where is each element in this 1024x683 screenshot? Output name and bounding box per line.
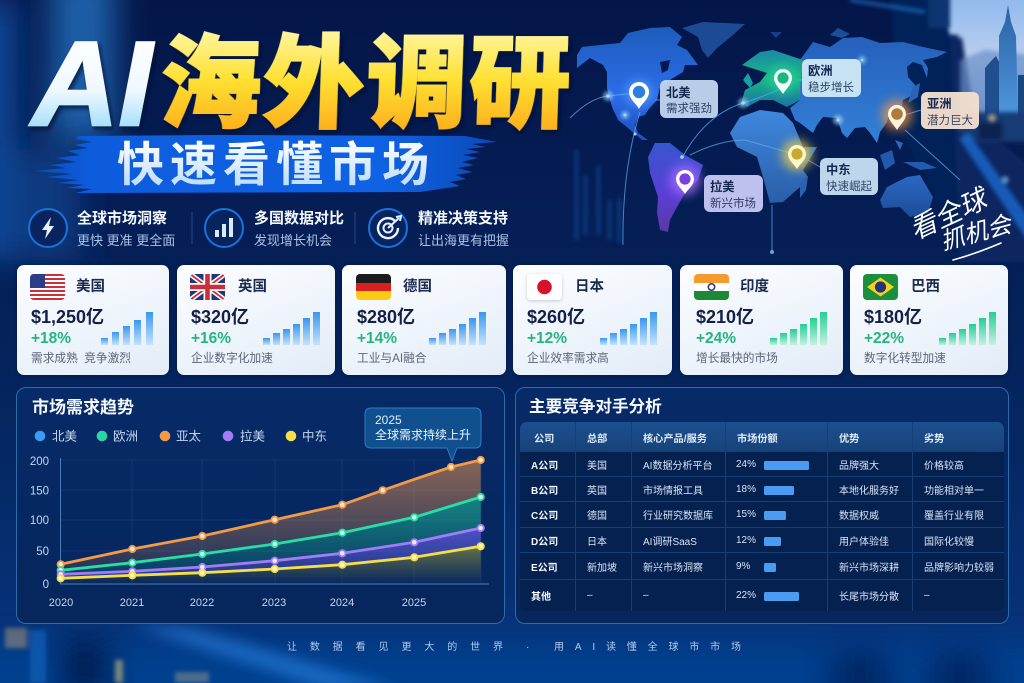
description: 需求成熟 竞争激烈 <box>31 352 131 365</box>
heading: competitor analysis: 主要竞争对手分析 <box>529 397 662 416</box>
label: Asia: 亚洲 <box>927 97 952 111</box>
feature: data comparison <box>254 210 344 248</box>
row: E: 品牌影响力较弱 <box>924 563 994 574</box>
card: Japan <box>513 265 672 375</box>
mini bars <box>429 312 486 345</box>
label: Middle East <box>820 158 878 195</box>
row: E: E公司 <box>531 563 558 574</box>
pin: North America <box>626 80 652 109</box>
title: AI: AI <box>29 17 155 151</box>
row: C <box>520 502 1004 528</box>
label: Europe: 稳步增长 <box>808 80 854 94</box>
country name: 英国 <box>238 279 267 295</box>
table header: 劣势 <box>924 434 944 444</box>
growth: +18% <box>31 330 71 347</box>
label: Latin America: 新兴市场 <box>710 196 756 210</box>
feature: data comparison: 多国数据对比 <box>254 210 344 227</box>
row: B: 本地化服务好 <box>839 486 899 497</box>
row: E: 新加坡 <box>587 563 617 574</box>
label: North America: 北美 <box>666 85 691 100</box>
y-axis labels <box>30 456 49 591</box>
legend: 北美 <box>52 430 77 444</box>
row: C: 覆盖行业有限 <box>924 511 984 522</box>
handwritten slogan: 抓机会 <box>936 204 1017 257</box>
row: others: – <box>924 590 930 601</box>
flag: India <box>694 274 729 300</box>
country name: 巴西 <box>911 279 940 295</box>
legend: 中东 <box>302 428 327 444</box>
table header: 总部 <box>587 434 607 444</box>
row: E: 新兴市场洞察 <box>643 563 703 574</box>
label: Middle East: 中东 <box>826 162 851 177</box>
x-axis labels: 2023 <box>262 597 286 609</box>
legend: 欧洲 <box>113 430 138 444</box>
row: C: 数据权威 <box>839 511 879 522</box>
country name: 美国 <box>76 279 105 295</box>
card: Brazil <box>850 265 1008 375</box>
feature: global insight: 更快 更准 更全面 <box>77 233 175 248</box>
growth: +16% <box>191 330 231 347</box>
subtitle: 快速看懂市场 <box>117 126 429 195</box>
table header: 市场份额 <box>737 434 778 444</box>
row: others: – <box>587 590 593 601</box>
x-axis labels: 2020 <box>49 597 73 609</box>
row: A: 24% <box>736 459 756 470</box>
row: A <box>520 452 1004 477</box>
label: North America <box>660 80 718 118</box>
table header: 核心产品/服务 <box>643 434 707 444</box>
series: Middle East <box>58 543 484 582</box>
row: A: 美国 <box>587 461 607 472</box>
feature: decision support: 让出海更有把握 <box>418 233 509 248</box>
description: 企业效率需求高 <box>527 352 609 365</box>
heading: market demand trend: 市场需求趋势 <box>32 398 134 417</box>
row: C: 15% <box>736 509 756 520</box>
label: Europe <box>802 59 861 97</box>
row: others: 长尾市场分散 <box>839 592 899 603</box>
row: E: 新兴市场深耕 <box>839 563 899 574</box>
mini bars <box>263 312 320 345</box>
mini bars <box>101 312 153 345</box>
market value: $210亿 <box>696 307 754 327</box>
row: A: 价格较高 <box>924 461 964 472</box>
series: Latin America <box>58 525 484 578</box>
table header: 优势 <box>839 434 859 444</box>
legend <box>35 428 327 444</box>
growth: +24% <box>696 330 736 347</box>
competitor table <box>520 422 1004 611</box>
description: 企业数字化加速 <box>191 352 273 365</box>
callout: 全球需求持续上升 <box>375 427 471 442</box>
flag: Brazil <box>863 274 898 300</box>
country name: 日本 <box>575 279 604 295</box>
description: 数字化转型加速 <box>864 352 946 365</box>
label: Asia: 潜力巨大 <box>927 113 973 127</box>
row: B <box>520 477 1004 502</box>
row: others <box>531 580 930 611</box>
label: Europe: 欧洲 <box>808 63 833 78</box>
market value: $280亿 <box>357 307 415 327</box>
connection arcs <box>570 80 960 250</box>
feature: decision support <box>418 210 509 248</box>
x-axis labels: 2024 <box>330 597 354 609</box>
row: others: 其他 <box>531 592 551 603</box>
y-axis labels: 200 <box>30 456 49 468</box>
row: D: 国际化较慢 <box>924 537 974 548</box>
row: D: D公司 <box>531 537 558 548</box>
row: B: B公司 <box>531 486 558 497</box>
market value: $260亿 <box>527 307 585 327</box>
row: D: 12% <box>736 535 756 546</box>
description: 工业与AI融合 <box>357 352 426 365</box>
row: C: 德国 <box>587 511 607 522</box>
title: 海外调研: 海外调研 <box>158 3 573 149</box>
row: A: A公司 <box>531 461 558 472</box>
row: E <box>520 553 1004 580</box>
table header <box>520 422 1004 452</box>
row: A: AI数据分析平台 <box>643 461 712 472</box>
market value: $320亿 <box>191 307 249 327</box>
label: Latin America <box>704 175 763 212</box>
x-axis labels: 2021 <box>120 597 144 609</box>
growth: +12% <box>527 330 567 347</box>
mini bars <box>939 312 996 345</box>
table header: 公司 <box>534 434 554 444</box>
legend: 拉美 <box>240 428 265 444</box>
continents <box>577 22 947 232</box>
row: B: 18% <box>736 484 756 495</box>
flag: UK <box>190 274 225 300</box>
label: Middle East: 快速崛起 <box>826 179 872 193</box>
footer slogan: · <box>526 642 529 653</box>
x-axis labels: 2022 <box>190 597 214 609</box>
area fills <box>61 460 481 584</box>
row: D <box>520 528 1004 553</box>
flag: USA <box>30 274 65 300</box>
row: D: 日本 <box>587 537 607 548</box>
y-axis labels: 0 <box>43 579 49 591</box>
panel: market demand trend <box>16 387 505 624</box>
mini bars <box>600 312 657 345</box>
market value: $1,250亿 <box>31 307 104 327</box>
row: E: 9% <box>736 561 750 572</box>
row: C: 行业研究数据库 <box>643 511 713 522</box>
pin: Europe <box>769 65 797 94</box>
pin: Middle East <box>782 140 812 170</box>
icon: bar chart <box>205 209 243 247</box>
icon: target <box>369 209 407 247</box>
panel: competitor analysis <box>515 387 1009 624</box>
row: B: 英国 <box>587 486 607 497</box>
row: C: C公司 <box>531 511 558 522</box>
market value: $180亿 <box>864 307 922 327</box>
card: India <box>680 265 843 375</box>
feature: global insight <box>77 210 175 248</box>
growth: +14% <box>357 330 397 347</box>
x-axis labels: 2025 <box>402 597 426 609</box>
country name: 德国 <box>403 279 432 295</box>
y-axis labels: 50 <box>36 546 49 558</box>
footer slogan: 用AI读懂全球市市场 <box>554 640 741 653</box>
y-axis labels: 150 <box>30 486 49 498</box>
series: Europe <box>58 494 484 574</box>
footer slogan: 让数据看见更大的世界 <box>287 640 503 653</box>
label: Asia <box>921 92 979 129</box>
card: Germany <box>342 265 506 375</box>
callout <box>365 408 481 461</box>
label: North America: 需求强劲 <box>666 102 712 115</box>
label: Latin America: 拉美 <box>710 179 735 194</box>
legend: 亚太 <box>176 428 202 444</box>
description: 增长最快的市场 <box>696 352 778 365</box>
series: Asia-Pacific <box>58 457 484 568</box>
icon: lightning <box>29 209 67 247</box>
row: D: AI调研SaaS <box>643 537 697 548</box>
pin: Asia <box>882 100 912 130</box>
handwritten slogan: 看全球 <box>902 176 995 247</box>
feature: global insight: 全球市场洞察 <box>77 210 167 227</box>
country name: 印度 <box>740 279 769 295</box>
growth: +22% <box>864 330 904 347</box>
feature: decision support: 精准决策支持 <box>418 210 508 227</box>
map light dots <box>603 56 1009 254</box>
flag: Japan <box>527 274 562 300</box>
row: D: 用户体验佳 <box>839 537 889 548</box>
pin: Latin America <box>670 165 700 195</box>
row: B: 功能相对单一 <box>924 486 984 497</box>
handwritten slogan <box>902 176 1017 260</box>
x-axis labels <box>49 597 426 609</box>
row: others: 22% <box>736 590 756 601</box>
mini bars <box>770 312 827 345</box>
row: others: – <box>643 590 649 601</box>
callout: 2025 <box>375 413 402 427</box>
y-axis labels: 100 <box>30 515 49 527</box>
card: UK <box>177 265 335 375</box>
row: A: 品牌强大 <box>839 461 879 472</box>
flag: Germany <box>356 274 391 300</box>
brush banner <box>33 135 497 193</box>
row: B: 市场情报工具 <box>643 486 703 497</box>
card: USA <box>17 265 169 375</box>
feature: data comparison: 发现增长机会 <box>254 233 332 248</box>
